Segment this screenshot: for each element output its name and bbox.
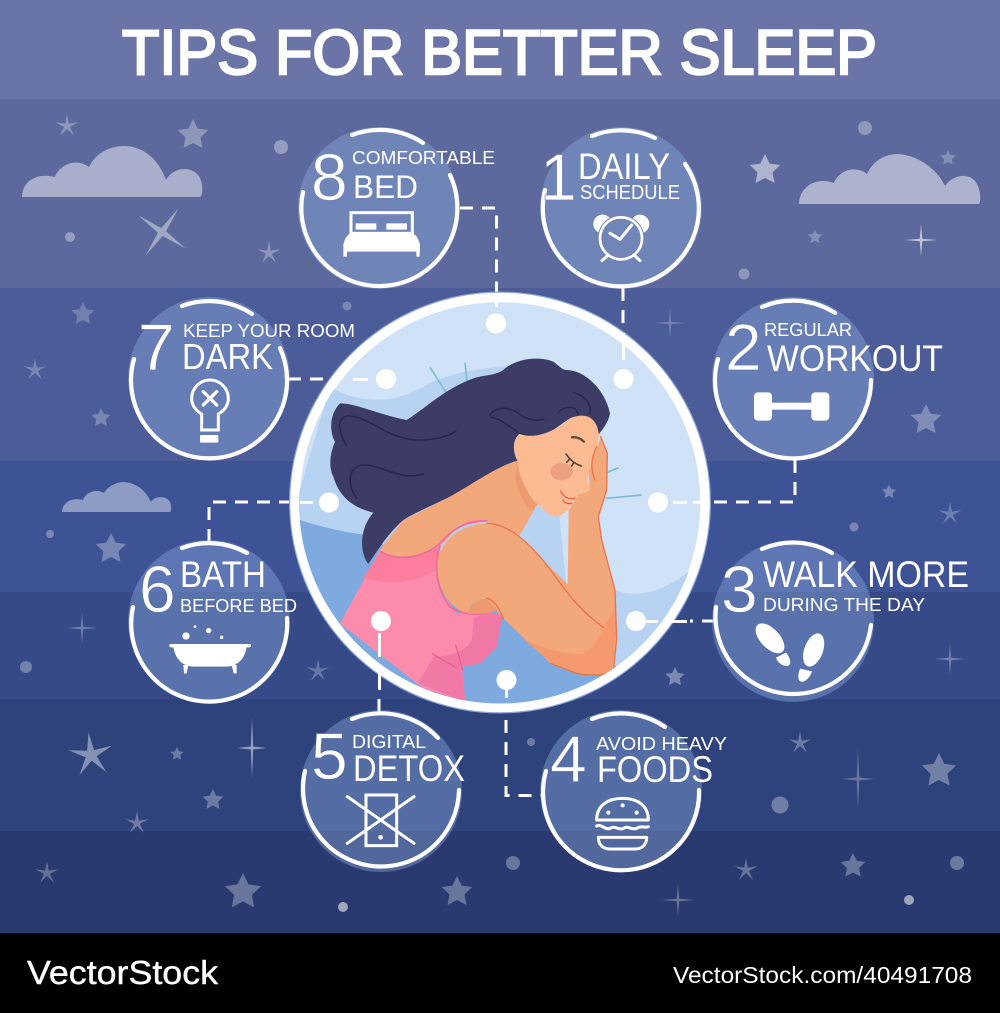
tip 4: avoid heavy foods: FOODS <box>597 749 713 790</box>
title: TIPS FOR BETTER SLEEP <box>122 18 877 88</box>
elbow shading <box>517 600 616 674</box>
tip 7: keep your room dark <box>128 297 355 459</box>
tip 4: avoid heavy foods: AVOID HEAVY <box>596 734 727 754</box>
footer brand: VectorStock <box>27 954 219 991</box>
tip 3: walk more during the day: 3 <box>721 552 758 626</box>
tip 7: keep your room dark: KEEP YOUR ROOM <box>183 321 355 341</box>
night sky stars and dots <box>20 114 965 916</box>
cloud: lower left <box>62 482 171 512</box>
tip 1: daily schedule: 1 <box>540 140 577 214</box>
tip 1: daily schedule <box>540 127 702 289</box>
tip 3: walk more during the day: WALK MORE <box>763 554 969 595</box>
icon: burger <box>597 798 648 849</box>
pink tank top <box>340 520 502 702</box>
icon: phone crossed out <box>347 795 414 846</box>
hair strands <box>340 393 590 498</box>
tip 7: keep your room dark: 7 <box>138 310 175 384</box>
icon: bathtub <box>169 625 251 673</box>
arm outline <box>487 437 617 675</box>
neck and shoulder <box>378 457 535 560</box>
dashed connectors <box>209 208 795 796</box>
darker neckline band <box>363 547 440 582</box>
neck shadow <box>515 463 538 512</box>
tip 7: keep your room dark: DARK <box>182 336 273 377</box>
tip 1: daily schedule: DAILY <box>578 146 670 187</box>
tip 2: regular workout: 2 <box>725 310 762 384</box>
tip 6: bath before bed <box>128 540 297 702</box>
tip 8: comfortable bed: 8 <box>311 140 348 214</box>
cloud: top left <box>22 146 202 197</box>
tip 8: comfortable bed <box>298 127 495 289</box>
tip 1: daily schedule: SCHEDULE <box>580 182 680 204</box>
node dots and inner ticks <box>300 302 701 698</box>
tip 6: bath before bed: 6 <box>139 552 176 626</box>
cloud: top right <box>799 154 980 204</box>
icon: footprints <box>750 618 828 682</box>
eyes, cheek and mouth <box>550 437 584 504</box>
pale wave <box>290 365 710 710</box>
tip 6: bath before bed: BATH <box>180 554 266 595</box>
tip 5: digital detox: 5 <box>311 719 348 793</box>
tip 3: walk more during the day: DURING THE DAY <box>763 595 925 615</box>
icon: alarm clock <box>593 215 649 262</box>
footer url: VectorStock.com/40491708 <box>673 962 972 988</box>
tip 2: regular workout: WORKOUT <box>767 338 943 379</box>
icon: dumbbell <box>754 392 829 421</box>
tip 8: comfortable bed: COMFORTABLE <box>352 148 495 168</box>
footer bar <box>0 933 1000 1013</box>
strap and armhole edge <box>381 521 487 614</box>
tip 4: avoid heavy foods: 4 <box>550 722 587 796</box>
tip 5: digital detox <box>300 710 465 872</box>
tip 8: comfortable bed: BED <box>353 169 418 205</box>
tip 6: bath before bed: BEFORE BED <box>180 596 297 616</box>
forearm and hand <box>437 437 617 675</box>
tip 5: digital detox: DIGITAL <box>352 732 426 752</box>
tip 2: regular workout <box>712 297 943 459</box>
sparkle rays <box>430 363 642 498</box>
face <box>514 416 599 516</box>
tip 3: walk more during the day <box>712 540 969 702</box>
shoulder shadow <box>468 598 497 614</box>
shirt creases <box>433 645 463 670</box>
icon: light bulb crossed <box>192 380 228 443</box>
icon: bed <box>343 213 420 257</box>
central illustration: sleeping woman <box>289 292 711 714</box>
darker side fold <box>418 612 502 702</box>
deeper blue wave <box>290 517 617 710</box>
tip 5: digital detox: DETOX <box>353 748 465 789</box>
tip 2: regular workout: REGULAR <box>764 320 852 340</box>
tip 4: avoid heavy foods <box>540 710 727 872</box>
hair <box>330 359 610 564</box>
